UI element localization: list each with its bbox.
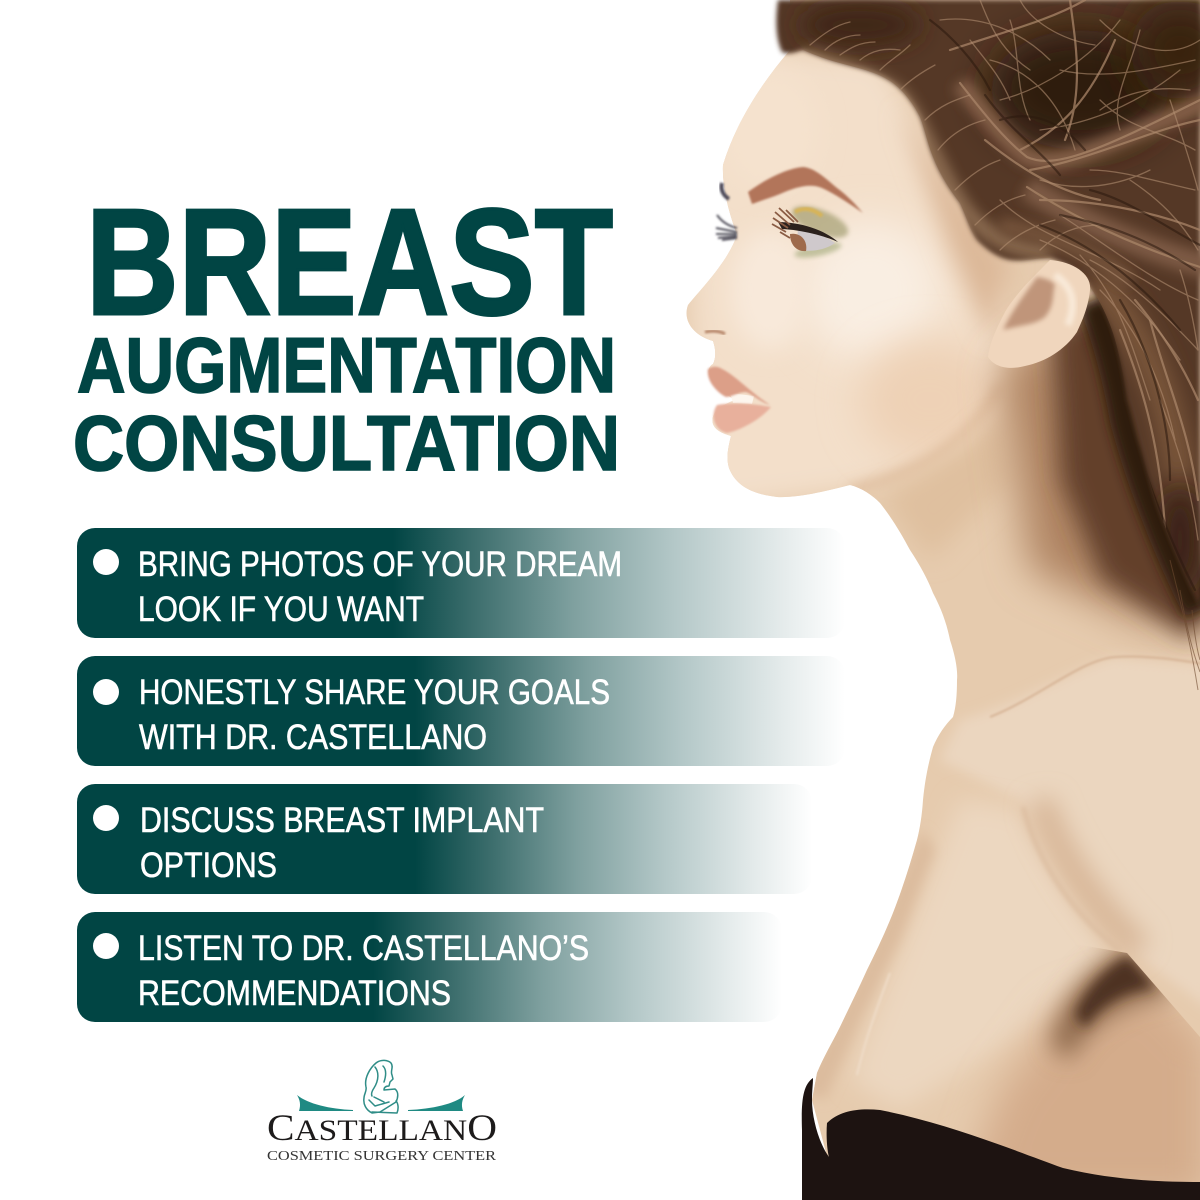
logo swoosh right (408, 1095, 465, 1111)
title line: AUGMENTATION: AUGMENTATION (77, 321, 616, 409)
panel: step 4: RECOMMENDATIONS (138, 974, 451, 1013)
logo wordmark: CASTELLAN O (267, 1108, 497, 1149)
skin shading (680, 40, 1200, 1200)
skin: face, neck and shoulders (687, 0, 1200, 1200)
eye and makeup (716, 183, 852, 261)
nostril (705, 331, 725, 334)
icon: woman with crossed arms (364, 1060, 398, 1113)
panel: step 3: DISCUSS BREAST IMPLANT (140, 801, 544, 840)
logo swoosh left (297, 1095, 353, 1111)
hair (776, 0, 1200, 690)
eyebrow (748, 167, 863, 213)
title line: BREAST: BREAST (86, 177, 613, 346)
panel: step 2: HONESTLY SHARE YOUR GOALS (139, 673, 610, 712)
ear (988, 260, 1090, 368)
far eyelashes (716, 215, 737, 240)
hair wisps over shoulder (1170, 560, 1200, 690)
panel: step 1: BRING PHOTOS OF YOUR DREAM (138, 545, 622, 584)
black top (802, 1078, 1200, 1200)
logo tagline: COSMETIC SURGERY CENTER (267, 1148, 496, 1163)
panel: step 1 (77, 528, 845, 638)
far eyebrow (721, 183, 729, 199)
title (73, 177, 620, 487)
panel: step 4: LISTEN TO DR. CASTELLANO’S (138, 929, 589, 968)
panel: step 3: OPTIONS (140, 846, 277, 885)
photo: woman in profile (680, 0, 1200, 1200)
panel: step 4 (77, 912, 782, 1022)
panel: step 3 (77, 784, 812, 894)
title line: CONSULTATION: CONSULTATION (73, 399, 620, 487)
panel: step 2: WITH DR. CASTELLANO (139, 718, 487, 757)
lips (708, 367, 771, 433)
hair strands (810, 0, 1200, 590)
hair tone patches (800, 0, 1200, 590)
panel: step 1: LOOK IF YOU WANT (138, 590, 424, 629)
panel: step 2 (77, 656, 845, 766)
logo: Castellano Cosmetic Surgery Center (267, 1060, 497, 1163)
